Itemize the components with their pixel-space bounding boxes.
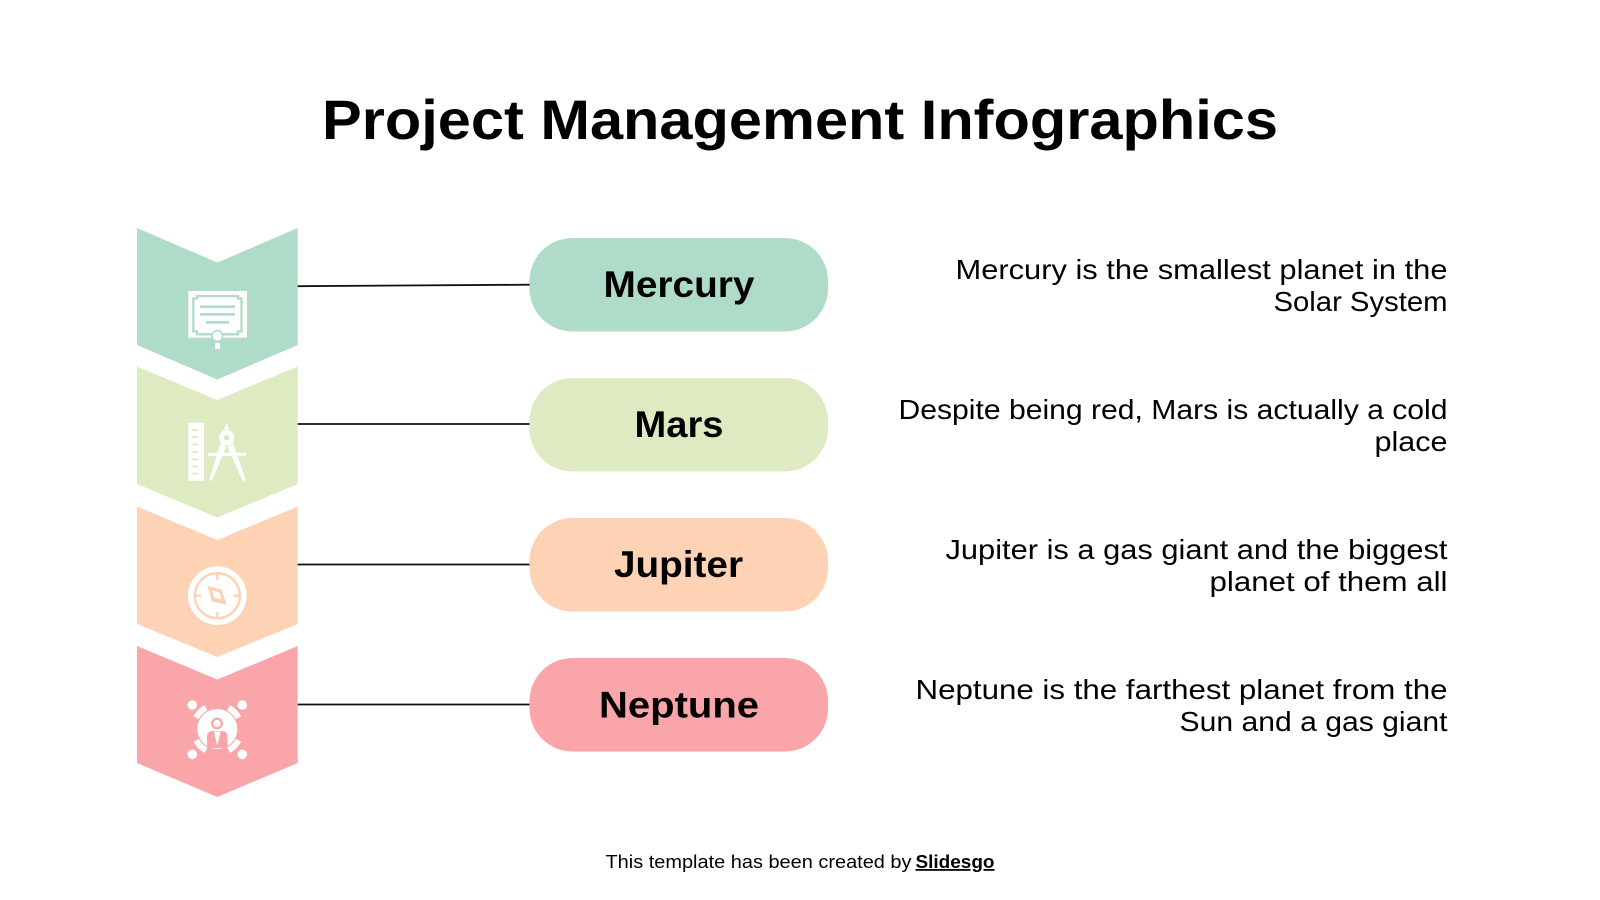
pill label: Jupiter: Jupiter (614, 544, 743, 585)
chevron: Mars (137, 366, 298, 518)
pill label: Mercury: Mercury (604, 264, 755, 305)
pill: Mars (530, 378, 828, 472)
row: Mars (137, 366, 1448, 518)
icon: team (188, 700, 247, 759)
description: Mercury: Solar System (1274, 286, 1448, 317)
description: Neptune: Sun and a gas giant (1180, 706, 1448, 737)
chevron: Jupiter (137, 506, 298, 657)
row: Jupiter (137, 506, 1448, 657)
description: Mars (898, 394, 1448, 457)
pill label: Neptune: Neptune (599, 684, 759, 726)
footer credit: Slidesgo (916, 852, 995, 872)
row: Mercury (137, 228, 1448, 380)
icon: ruler and compass (188, 423, 246, 481)
footer credit: This template has been created by (606, 852, 912, 872)
description: Jupiter: planet of them all (1210, 566, 1448, 597)
pill: Mercury (530, 238, 828, 332)
icon: certificate (188, 291, 247, 349)
connector line: Mars (298, 423, 530, 425)
chevron: Mercury (137, 228, 298, 380)
connector line: Neptune (298, 704, 530, 706)
description: Neptune: Neptune is the farthest planet from the (916, 674, 1448, 705)
description: Mars: place (1374, 426, 1448, 457)
description: Jupiter: Jupiter is a gas giant and the biggest (946, 534, 1448, 565)
description: Mercury: Mercury is the smallest planet in the (956, 254, 1448, 285)
pill: Jupiter (530, 518, 828, 612)
description: Mercury (956, 254, 1448, 317)
title: Project Management Infographics (322, 88, 1278, 151)
row: Neptune (137, 646, 1448, 797)
description: Mars: Despite being red, Mars is actually a cold (898, 394, 1448, 425)
chevron: Neptune (137, 646, 298, 797)
icon: compass (188, 566, 247, 625)
description: Neptune (916, 674, 1448, 737)
pill: Neptune (530, 658, 828, 752)
connector line: Jupiter (298, 564, 530, 566)
description: Jupiter (946, 534, 1448, 597)
pill label: Mars: Mars (634, 404, 724, 445)
connector line: Mercury (298, 285, 530, 286)
